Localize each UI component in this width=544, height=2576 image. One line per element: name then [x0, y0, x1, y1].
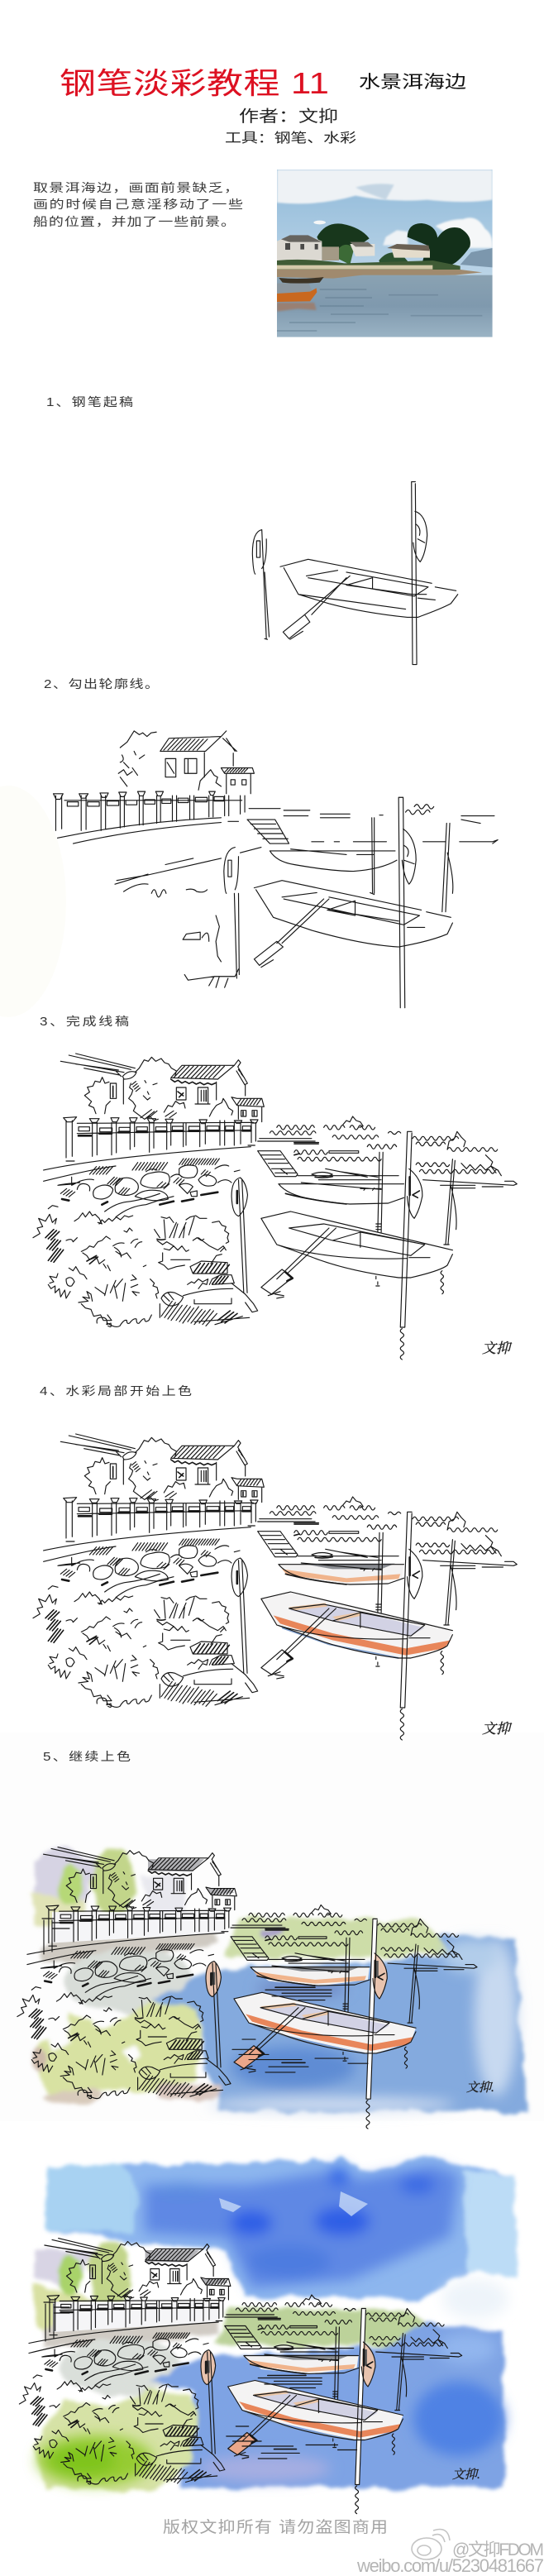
faint paper tint at left of step 2	[0, 786, 66, 1017]
signature step 5: 文抑.	[466, 2081, 494, 2095]
intro text: 画的时候自己意淫移动了一些	[33, 198, 243, 212]
step 4 sketch: boats coloured	[33, 1434, 517, 1740]
tools line: 工具：钢笔、水彩	[225, 131, 356, 146]
step 2 label: 2、勾出轮廓线。	[44, 677, 159, 691]
intro text	[33, 182, 243, 229]
soft water tones step 5	[207, 1939, 518, 2112]
title: 钢笔淡彩教程 11	[60, 67, 329, 100]
step 6 final painting	[19, 2154, 518, 2514]
boats and line work final	[19, 2239, 462, 2514]
sky wash	[35, 2154, 518, 2491]
left fence end final	[44, 2302, 69, 2341]
soft tones final painting	[37, 2165, 508, 2485]
signature step 4: 文抑	[482, 1721, 513, 1737]
step 1 sketch: boat and poles	[252, 482, 458, 665]
step 2 sketch: outline drawing	[54, 731, 498, 1008]
watercolour washes step 5	[31, 1847, 529, 2111]
signature step 3: 文抑	[482, 1341, 513, 1356]
author line: 作者：文抑	[239, 107, 338, 125]
light patches in sky	[219, 2191, 368, 2216]
step 3 label: 3、完成线稿	[40, 1015, 129, 1029]
intro text: 取景洱海边，画面前景缺乏，	[33, 182, 239, 195]
left fence end step 5	[42, 1919, 69, 1954]
step 3 sketch: finished line drawing	[33, 1054, 517, 1360]
paper tint behind step 5	[0, 1732, 544, 2121]
step 5 painting	[17, 1847, 529, 2129]
copyright note: 版权文抑所有 请勿盗图商用	[163, 2518, 388, 2536]
step 1 label: 1、钢笔起稿	[46, 395, 133, 409]
weibo url: weibo.com/u/5230481667	[356, 2555, 544, 2576]
subtitle: waterside scene: 水景洱海边	[359, 72, 466, 91]
reference photo of Erhai lakeside	[277, 170, 493, 337]
weibo handle: @文抑FDOM	[452, 2540, 544, 2559]
intro text: 船的位置，并加了一些前景。	[33, 216, 236, 229]
boats and line work step 5	[17, 1847, 477, 2129]
icon: weibo logo	[412, 2529, 450, 2559]
step 5 label: 5、继续上色	[43, 1750, 131, 1764]
step 4 label: 4、水彩局部开始上色	[40, 1384, 192, 1398]
signature final: 文抑.	[452, 2468, 480, 2482]
